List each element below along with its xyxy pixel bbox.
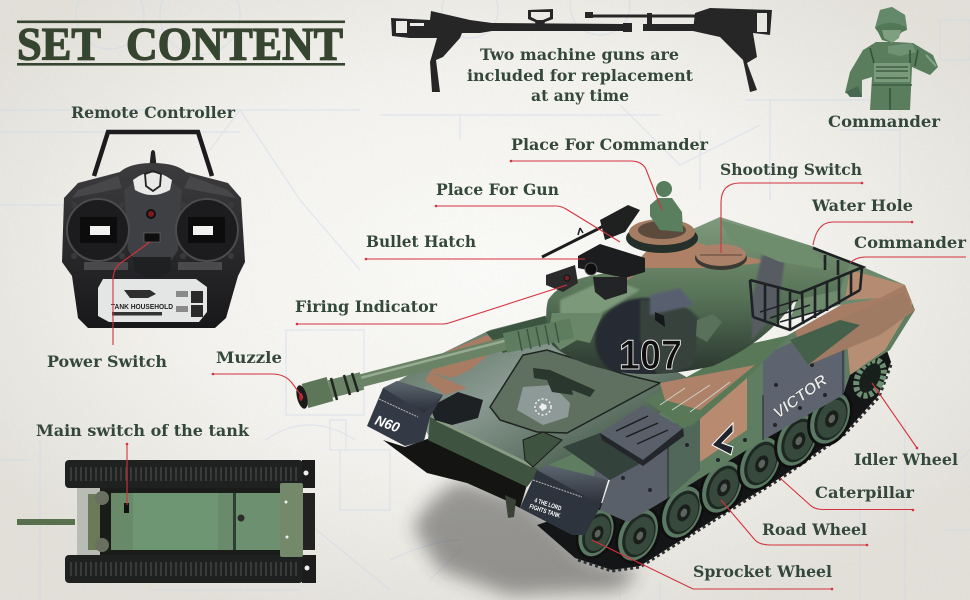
idler wheel — [849, 354, 891, 402]
leader: commander hole — [850, 257, 966, 263]
front brackets — [430, 392, 483, 425]
main tank — [294, 181, 915, 571]
machine gun right — [585, 8, 772, 92]
label: place for commander: Place For Commander — [511, 135, 709, 154]
label: road wheel: Road Wheel — [762, 520, 867, 539]
top track — [65, 460, 315, 488]
right front block: FIGHTS TANK — [528, 503, 561, 520]
skirt camouflage — [590, 285, 915, 525]
label: sprocket wheel: Sprocket Wheel — [693, 562, 832, 581]
label: bullet hatch: Bullet Hatch — [366, 232, 476, 251]
chevron — [712, 423, 733, 455]
text: machine guns note: Two machine guns are — [480, 45, 679, 64]
controller shield icon — [145, 171, 161, 191]
tow hook — [505, 495, 516, 518]
hull front band — [428, 417, 540, 487]
emblem — [535, 399, 551, 415]
controller body — [62, 163, 245, 328]
hatch outline — [490, 350, 660, 433]
hull side skirt — [537, 285, 915, 522]
leader: firing indicator — [297, 285, 567, 324]
turret and upper body — [546, 217, 850, 374]
commander on tank — [650, 181, 683, 232]
controller centre panel — [124, 178, 182, 262]
controller emblem — [133, 172, 172, 195]
label: power switch: Power Switch — [47, 352, 167, 371]
machine gun left — [391, 9, 632, 92]
title: CONTENT — [126, 18, 343, 70]
leader: shooting switch — [721, 183, 862, 253]
right deck stripes — [645, 335, 790, 428]
deck bracket — [533, 368, 595, 397]
left front block — [367, 381, 443, 446]
label: remote controller: Remote Controller — [71, 103, 236, 122]
label: caterpillar: Caterpillar — [815, 483, 915, 502]
power switch — [144, 233, 160, 242]
label: idler wheel: Idler Wheel — [854, 450, 958, 469]
leader: idler wheel — [872, 383, 917, 448]
leader: main switch — [126, 444, 128, 505]
label: firing indicator: Firing Indicator — [295, 297, 438, 316]
fender vents box — [600, 405, 684, 466]
commander hatch — [626, 219, 698, 253]
leader: caterpillar — [780, 478, 913, 510]
controller label plate: TANK HOUSEHOLD — [111, 304, 173, 311]
right front block: 4 THE LORD — [533, 497, 562, 513]
mounted gun — [542, 205, 640, 257]
stick bolts — [71, 202, 234, 259]
leader: water hole — [813, 222, 912, 245]
ground shadow — [413, 480, 640, 595]
tank top view — [17, 460, 316, 583]
track — [537, 345, 891, 570]
turret vent — [696, 314, 722, 342]
right stick — [176, 199, 238, 261]
deck slats — [563, 433, 643, 480]
side text: VICTOR — [770, 372, 831, 422]
rear plate — [280, 483, 303, 557]
sensor box — [546, 244, 645, 300]
basket — [750, 248, 863, 330]
label: commander hole: Commander — [854, 233, 967, 252]
rear deck behind basket — [790, 248, 905, 320]
controller handle — [94, 132, 212, 176]
rear plate hatch — [695, 244, 747, 270]
indicator light — [147, 210, 155, 218]
hull front — [397, 312, 700, 485]
leader: commander spot — [511, 161, 662, 210]
main switch — [124, 503, 129, 513]
controller antenna knob — [149, 150, 157, 170]
text: machine guns note — [467, 45, 694, 105]
leader: place for gun — [436, 206, 620, 242]
label: water hole: Water Hole — [811, 196, 913, 215]
icon: commander figure — [845, 7, 938, 110]
firing indicator light — [564, 275, 570, 281]
leader: power switch — [113, 242, 150, 345]
leader: bullet hatch — [366, 258, 585, 260]
front tow bracket — [523, 432, 562, 467]
controller shoulders — [72, 176, 236, 198]
road wheels — [568, 382, 862, 571]
controller label plate — [98, 279, 207, 322]
title — [17, 18, 345, 70]
left front block: N60 — [373, 412, 402, 435]
leader: sprocket wheel — [592, 540, 832, 589]
green fender box — [486, 316, 555, 353]
label: main switch: Main switch of the tank — [36, 421, 250, 440]
turret number: 107 — [619, 331, 682, 378]
bottom track — [65, 555, 316, 583]
left stick — [67, 199, 129, 261]
remote controller — [62, 132, 245, 328]
label: place for gun: Place For Gun — [436, 180, 559, 199]
leader: muzzle — [213, 374, 303, 398]
turret camouflage — [560, 220, 830, 382]
underside left — [383, 438, 527, 508]
leader: road wheel — [721, 500, 867, 545]
right front block — [520, 465, 608, 535]
text: machine guns note: at any time — [531, 86, 629, 105]
brown deck slats — [425, 335, 500, 395]
hull plate — [111, 493, 280, 550]
barrel — [294, 323, 572, 410]
text: machine guns note: included for replacement — [467, 66, 694, 85]
barrel — [17, 519, 75, 525]
turret mantlet — [548, 313, 603, 350]
leader end dots — [126, 160, 918, 590]
front plate — [77, 488, 113, 555]
lower grip — [133, 257, 171, 278]
rear fender — [790, 292, 915, 365]
label: commander: Commander — [828, 112, 941, 131]
label: shooting switch: Shooting Switch — [720, 160, 862, 179]
label: muzzle: Muzzle — [216, 348, 282, 367]
title: SET — [17, 18, 101, 70]
